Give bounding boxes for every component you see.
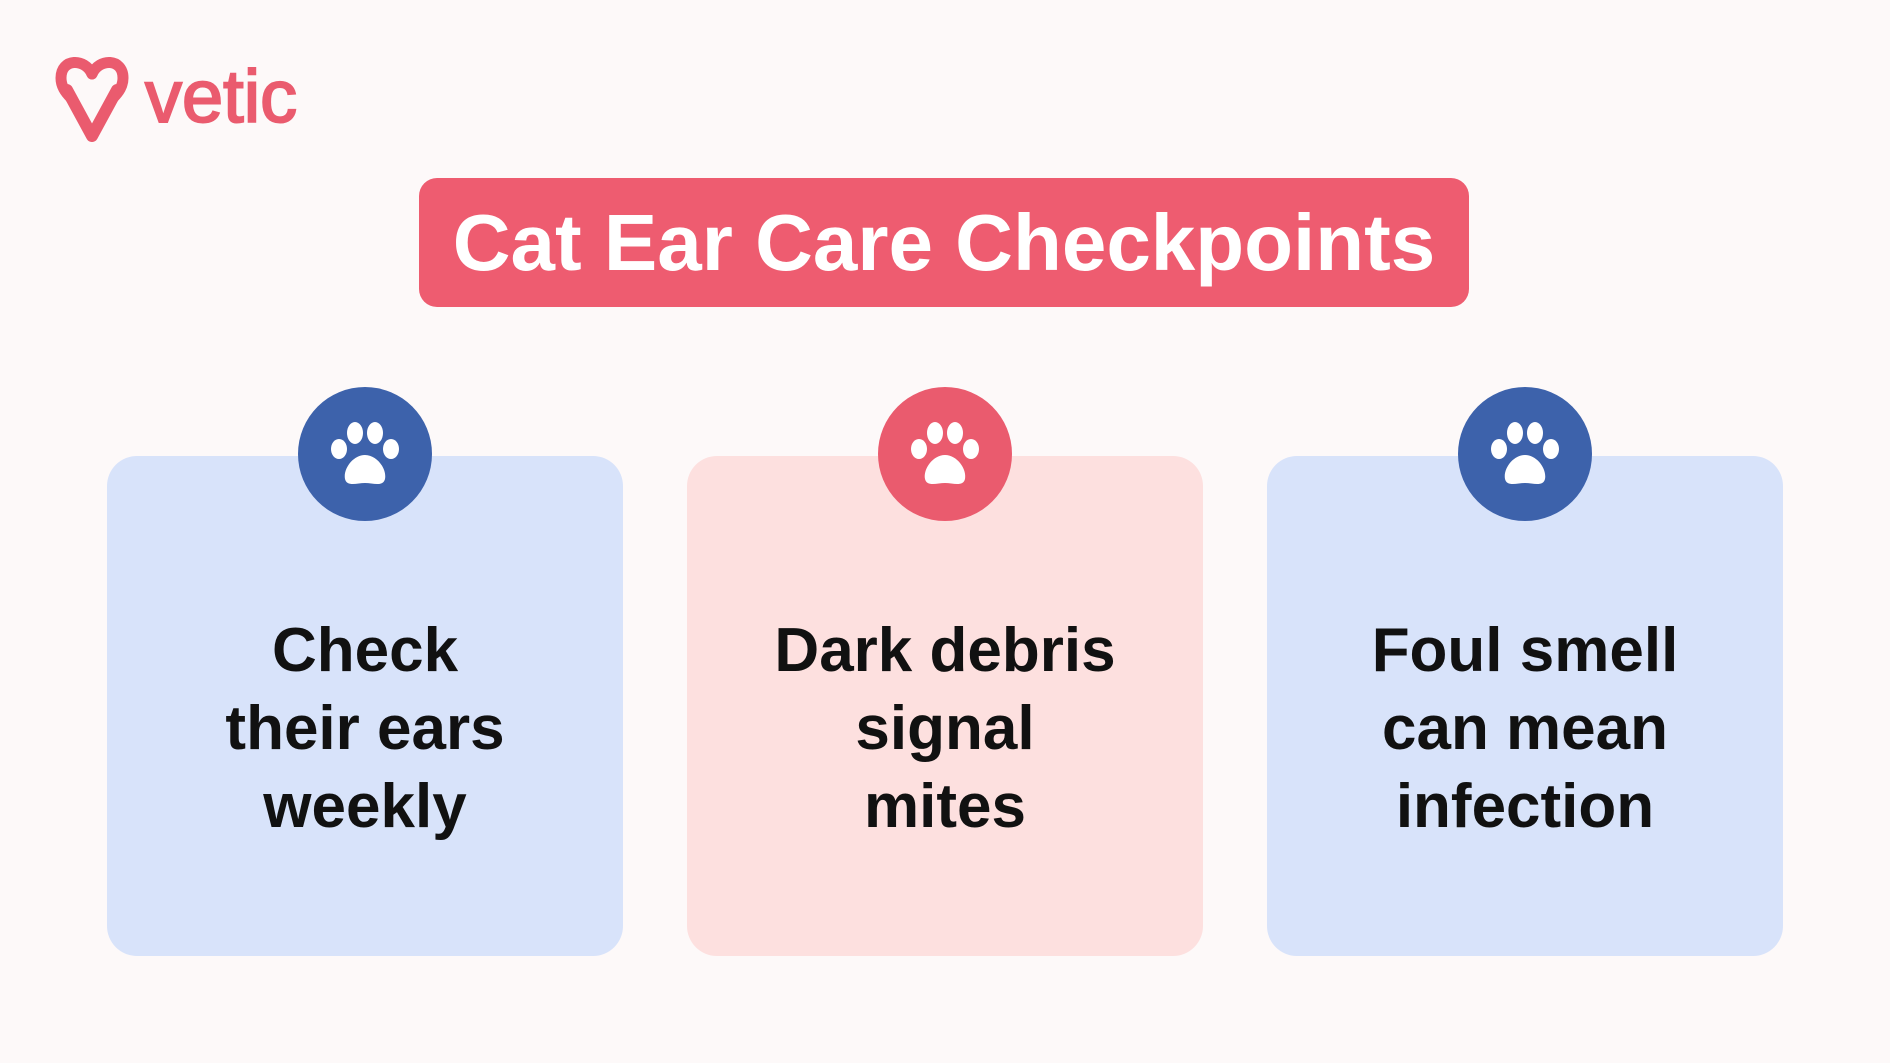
text: dark debris — [774, 616, 1116, 841]
text: check weekly: weekly — [263, 772, 467, 841]
title — [419, 178, 1469, 307]
logo text: vetic — [145, 55, 297, 138]
panel: check weekly — [107, 456, 623, 956]
icon: paw pink — [878, 387, 1012, 521]
panel: dark debris — [687, 456, 1203, 956]
icon: heart V — [56, 57, 128, 142]
text: check weekly — [225, 616, 505, 841]
panel: foul smell — [1267, 456, 1783, 956]
text: foul smell: infection — [1396, 772, 1654, 841]
icon: paw blue — [298, 387, 432, 521]
text: dark debris: Dark debris — [774, 616, 1116, 685]
text: foul smell — [1372, 616, 1678, 841]
text: check weekly: Check — [272, 616, 458, 685]
text: check weekly: their ears — [225, 694, 505, 763]
title: Cat Ear Care Checkpoints — [453, 198, 1435, 286]
text: dark debris: mites — [864, 772, 1026, 841]
icon: paw blue 2 — [1458, 387, 1592, 521]
text: foul smell: can mean — [1382, 694, 1668, 763]
text: dark debris: signal — [855, 694, 1035, 763]
logo — [56, 55, 297, 142]
text: foul smell: Foul smell — [1372, 616, 1678, 685]
